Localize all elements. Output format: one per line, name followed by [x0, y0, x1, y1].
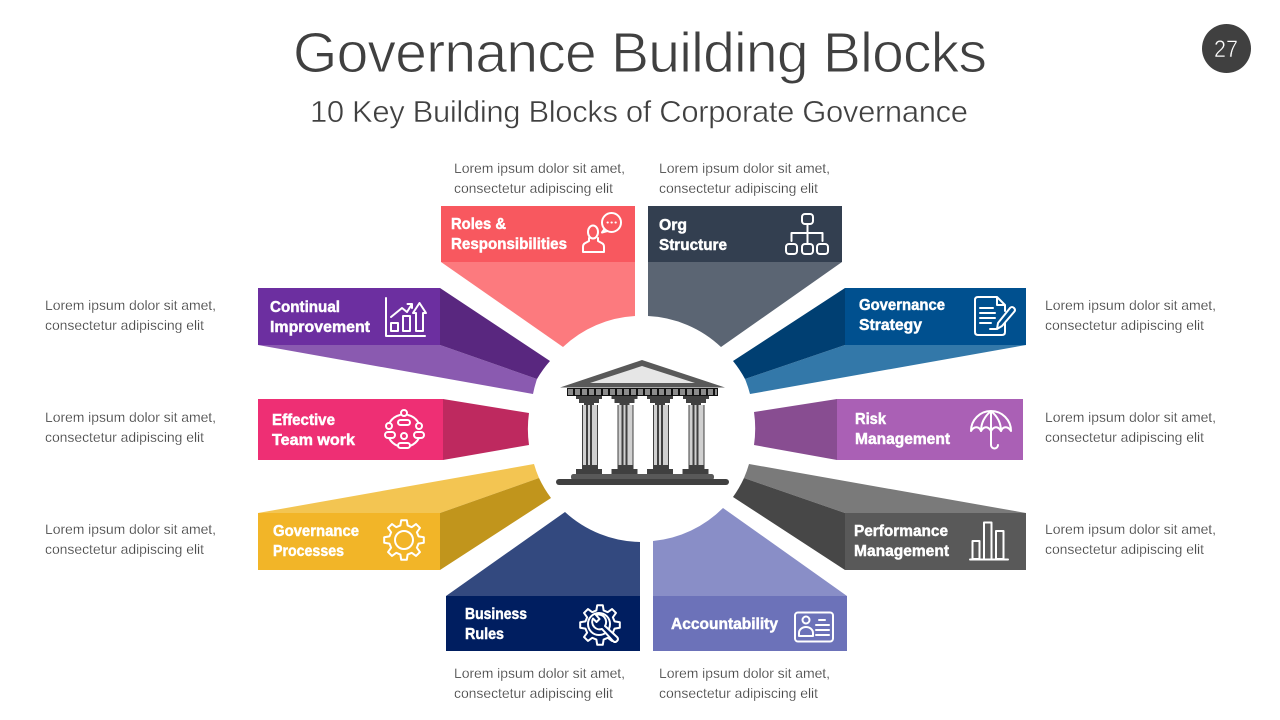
title: Governance Building Blocks — [293, 21, 987, 85]
panel: business rules: Business — [465, 606, 527, 623]
text: accountability description: Lorem ipsum dolor sit amet, — [659, 665, 830, 681]
text: performance management description: consectetur adipiscing elit — [1045, 541, 1204, 557]
text: org description: consectetur adipiscing elit — [659, 180, 818, 196]
icon: central temple — [556, 360, 729, 485]
panel: governance processes — [258, 464, 551, 570]
panel: governance processes: Governance — [273, 523, 359, 540]
panel: roles and responsibilities — [441, 206, 635, 347]
text: performance management description: Lorem ipsum dolor sit amet, — [1045, 521, 1216, 537]
text: business rules description: consectetur adipiscing elit — [454, 685, 613, 701]
text: roles description: consectetur adipiscing elit — [454, 180, 613, 196]
panel: performance management: Performance — [854, 523, 948, 540]
text: governance processes description: consectetur adipiscing elit — [45, 541, 204, 557]
panel: org structure: Structure — [659, 237, 727, 254]
page number badge: 27 — [1214, 36, 1238, 63]
subtitle: 10 Key Building Blocks of Corporate Governance — [310, 94, 968, 129]
panel: governance processes: Processes — [273, 543, 344, 560]
icon: document with pen — [975, 297, 1015, 335]
panel: continual improvement — [258, 288, 550, 394]
panel: effective team work: Effective — [272, 412, 335, 429]
text: risk management description: Lorem ipsum dolor sit amet, — [1045, 409, 1216, 425]
text: risk management description: consectetur adipiscing elit — [1045, 429, 1204, 445]
icon: gear with wrench — [580, 605, 620, 645]
icon: growth chart — [386, 298, 426, 336]
text: performance management description — [1045, 521, 1216, 557]
text: governance strategy description — [1045, 297, 1216, 333]
icon: team network — [385, 410, 424, 448]
panel: risk management — [754, 399, 1023, 460]
icon: person with speech bubble — [583, 213, 621, 252]
panel: effective team work: Team work — [272, 432, 355, 449]
panel: roles and responsibilities: Roles & — [451, 216, 506, 233]
icon: id card — [795, 612, 833, 642]
text: governance strategy description: consectetur adipiscing elit — [1045, 317, 1204, 333]
text: accountability description: consectetur adipiscing elit — [659, 685, 818, 701]
page number badge — [1202, 24, 1251, 73]
panel: effective team work — [258, 399, 529, 460]
panel: business rules — [446, 512, 640, 651]
text: governance processes description — [45, 521, 216, 557]
text: governance strategy description: Lorem ipsum dolor sit amet, — [1045, 297, 1216, 313]
text: roles description — [454, 160, 625, 196]
panel: governance strategy: Governance — [859, 297, 945, 314]
panel: org structure: Org — [659, 217, 687, 234]
panel: risk management: Risk — [855, 411, 886, 428]
panel: performance management — [733, 464, 1026, 570]
text: risk management description — [1045, 409, 1216, 445]
panel: governance strategy — [733, 288, 1026, 394]
text: org description: Lorem ipsum dolor sit amet, — [659, 160, 830, 176]
text: continual improvement description — [45, 297, 216, 333]
panel: governance strategy: Strategy — [859, 317, 922, 334]
icon: umbrella — [971, 411, 1011, 448]
text: governance processes description: Lorem ipsum dolor sit amet, — [45, 521, 216, 537]
icon: bar chart — [970, 522, 1008, 560]
panel: accountability: Accountability — [671, 616, 778, 633]
text: business rules description — [454, 665, 625, 701]
panel: continual improvement: Continual — [270, 299, 340, 316]
text: org description — [659, 160, 830, 196]
text: team work description: Lorem ipsum dolor sit amet, — [45, 409, 216, 425]
icon: gear — [384, 520, 424, 560]
panel: accountability — [653, 508, 847, 651]
panel: performance management: Management — [854, 543, 949, 560]
text: business rules description: Lorem ipsum dolor sit amet, — [454, 665, 625, 681]
text: roles description: Lorem ipsum dolor sit amet, — [454, 160, 625, 176]
panel: business rules: Rules — [465, 626, 504, 643]
panel: org structure — [648, 206, 842, 347]
text: team work description: consectetur adipiscing elit — [45, 429, 204, 445]
text: continual improvement description: consectetur adipiscing elit — [45, 317, 204, 333]
panel: risk management: Management — [855, 431, 950, 448]
text: accountability description — [659, 665, 830, 701]
panel: continual improvement: Improvement — [270, 319, 370, 336]
text: team work description — [45, 409, 216, 445]
icon: org chart — [786, 214, 828, 254]
panel: roles and responsibilities: Responsibilities — [451, 236, 567, 253]
text: continual improvement description: Lorem ipsum dolor sit amet, — [45, 297, 216, 313]
